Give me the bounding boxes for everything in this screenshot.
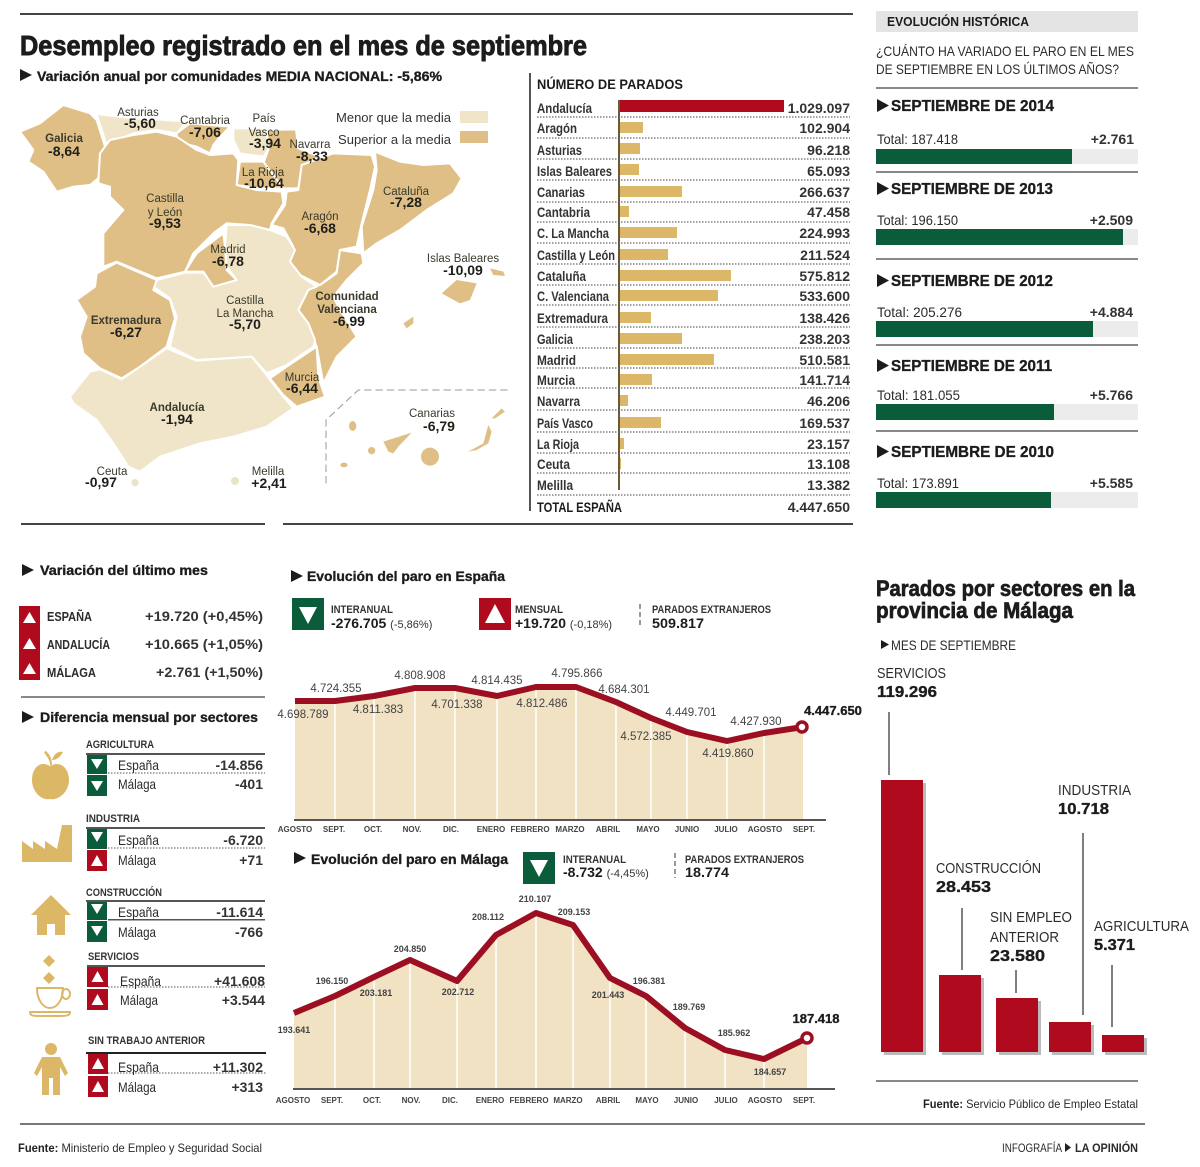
panel: variación del último mes [19,562,263,680]
interanual indicator [523,852,649,884]
panel: evolución del paro en España [277,568,862,834]
interanual indicator: -8.732 (-4,45%) [563,864,649,880]
foreign unemployed [675,853,804,880]
line chart: Málaga: ENERO [476,1096,504,1105]
year 2012: Total: 205.276 [877,304,962,320]
map labels: Cataluña [383,186,430,198]
line chart: Málaga: 196.150 [316,976,348,986]
map regions [20,105,510,486]
map labels: Islas Baleares [427,253,499,265]
line chart: Málaga: 201.443 [592,990,624,1000]
line chart: Málaga: JUNIO [674,1096,698,1105]
line chart: España: SEPT. [323,825,345,834]
year 2013: SEPTIEMBRE DE 2013 [891,181,1053,198]
map labels: Andalucía [150,402,205,414]
map labels: -5,60 [124,115,156,131]
row values: 96.218 [807,142,850,158]
España row: +19.720 (+0,45%) [145,608,263,624]
line chart: España: 4.447.650 [804,703,862,718]
footer: credit: INFOGRAFÍA [1002,1140,1062,1155]
bar: construcción: 28.453 [936,879,991,896]
panel heading [876,11,1138,32]
bar: sin empleo anterior: SIN EMPLEO [990,909,1072,926]
row values: 575.812 [799,268,850,284]
year 2013: +2.509 [1090,212,1133,228]
sector: construcción: España [118,904,159,920]
map legend: Menor que la media [336,110,452,125]
Andalucía row [47,636,263,652]
panel: map of Spain [20,105,510,491]
heading: Evolución del paro en España [307,568,505,584]
line chart: España: 4.814.435 [471,675,523,687]
row labels: Cataluña [537,268,586,284]
map labels: -10,09 [443,262,483,278]
dotted row separators [537,117,850,495]
line chart: Málaga: AGOSTO [276,1096,310,1105]
heading [876,576,1136,623]
sector: agricultura: Málaga [118,776,156,792]
map legend: Superior a la media [338,132,452,147]
row values: 4.447.650 [788,499,850,515]
heading: Diferencia mensual por sectores [40,709,258,725]
line chart: Málaga: 187.418 [792,1011,840,1026]
row values: 13.382 [807,477,850,493]
line chart: España: 4.701.338 [431,699,483,711]
line chart: España: FEBRERO [510,825,550,834]
row labels: Navarra [537,393,580,409]
line chart: Málaga: NOV. [402,1096,420,1105]
line chart: España: MARZO [555,825,585,834]
row labels [537,100,622,515]
map labels: -9,53 [149,215,181,231]
bar: agricultura: AGRICULTURA [1094,918,1189,935]
map labels: Castilla [226,295,264,307]
year 2010: Total: 173.891 [877,475,959,491]
map labels: Galicia [45,133,83,145]
sector: industria: INDUSTRIA [86,813,140,825]
row labels: Melilla [537,477,573,493]
line chart: España [277,668,862,834]
sector: servicios: +3.544 [222,992,265,1008]
question text: DE SEPTIEMBRE EN LOS ÚLTIMOS AÑOS? [876,61,1119,77]
row labels: País Vasco [537,415,593,431]
bar: servicios: 119.296 [877,684,937,701]
sector: industria: España [118,832,159,848]
row values: 533.600 [799,288,850,304]
line chart: España: 4.812.486 [516,698,568,710]
Málaga row [47,664,263,680]
footer: credit: LA OPINIÓN [1075,1140,1138,1155]
line chart: España: 4.427.930 [730,716,782,728]
line chart: España: JULIO [714,825,738,834]
map labels: Aragón [301,211,339,223]
bar: agricultura [1094,918,1189,1055]
panel: número de parados table [529,73,850,515]
row values: 46.206 [807,393,850,409]
line chart: Málaga: OCT. [363,1096,381,1105]
year 2014 [876,98,1138,164]
map labels: País [252,113,276,125]
year 2013 [876,181,1138,245]
map labels [45,107,499,491]
row labels: Canarias [537,184,585,200]
map legend [336,110,488,147]
sector: agricultura: -401 [235,776,263,792]
footer: source: Fuente: Ministerio de Empleo y Seguridad Social [18,1141,262,1155]
row labels: Castilla y León [537,247,615,263]
row labels: Ceuta [537,456,570,472]
line chart: Málaga: 203.181 [360,988,392,998]
line chart: Málaga: 196.381 [633,976,665,986]
bar: construcción [936,860,1041,1055]
row labels: C. La Mancha [537,225,609,241]
sector: sin trabajo anterior [86,1035,267,1097]
line chart: España: NOV. [403,825,421,834]
line chart: Málaga: SEPT. [321,1096,343,1105]
row values: 65.093 [807,163,850,179]
foreign unemployed: PARADOS EXTRANJEROS [685,854,804,866]
table heading: NÚMERO DE PARADOS [537,75,683,92]
map labels: -6,78 [212,253,244,269]
icon: apple [32,751,69,799]
row labels: Aragón [537,120,577,136]
row labels: Cantabria [537,204,590,220]
line chart: España: 4.698.789 [277,709,329,721]
line chart: España: ABRIL [596,825,620,834]
row labels: C. Valenciana [537,288,609,304]
year 2011: +5.766 [1090,387,1133,403]
line chart: España: SEPT. [793,825,815,834]
bar: sin empleo anterior: 23.580 [990,948,1045,965]
map subtitle: Variación anual por comunidades MEDIA NACIONAL: -5,86% [37,68,443,84]
bar: industria: 10.718 [1058,801,1109,818]
sector: sin trabajo anterior: +313 [231,1079,263,1095]
row values: 138.426 [799,310,850,326]
row values: 169.537 [799,415,850,431]
sector: construcción: CONSTRUCCIÓN [86,886,162,899]
line chart: España: 4.419.860 [702,748,754,760]
line chart: España: OCT. [364,825,382,834]
sector: construcción: Málaga [118,924,156,940]
map labels: -3,94 [249,135,281,151]
panel: diferencia mensual por sectores [22,709,267,1097]
map labels: La Mancha [217,308,274,320]
sector: sin trabajo anterior: SIN TRABAJO ANTERIOR [88,1035,205,1047]
row values: 102.904 [799,120,850,136]
interanual indicator: INTERANUAL [331,604,393,616]
mensual indicator: +19.720 (-0,18%) [515,615,612,631]
map labels: La Rioja [242,167,285,179]
interanual indicator: INTERANUAL [563,854,626,866]
line chart: España: AGOSTO [278,825,312,834]
panel: evolución histórica [876,11,1138,508]
year 2010 [876,444,1138,508]
panel heading: EVOLUCIÓN HISTÓRICA [887,14,1030,29]
map labels: -8,64 [48,143,80,159]
row labels: Extremadura [537,310,608,326]
line chart: Málaga: 210.107 [519,894,551,904]
source: Servicio Público: Fuente: Servicio Público de Empleo Estatal [923,1097,1138,1111]
map labels: -6,79 [423,418,455,434]
year 2014: Total: 187.418 [877,131,958,147]
panel: evolución del paro en Málaga [276,851,840,1105]
line chart: Málaga [276,894,840,1105]
map labels: y León [148,207,182,219]
Andalucía row: ANDALUCÍA [47,637,110,652]
year 2010: SEPTIEMBRE DE 2010 [891,444,1054,461]
row labels: La Rioja [537,436,579,452]
map labels: -6,27 [110,324,142,340]
line chart: Málaga: 189.769 [673,1002,705,1012]
map labels: Asturias [117,107,159,119]
map labels: -6,99 [333,313,365,329]
line chart: Málaga: AGOSTO [748,1096,782,1105]
row labels: Galicia [537,331,573,347]
sector: industria: -6.720 [223,832,263,848]
line chart: Málaga: JULIO [714,1096,738,1105]
line chart: Málaga: 193.641 [278,1025,310,1035]
map labels: Vasco [248,127,280,139]
map labels: Valenciana [317,304,377,316]
line chart: España: ENERO [477,825,505,834]
Málaga row: MÁLAGA [47,665,97,680]
bar: servicios: SERVICIOS [877,665,946,682]
icon: coffee cup [30,955,70,1016]
bar: construcción: CONSTRUCCIÓN [936,860,1041,877]
España row: ESPAÑA [47,609,93,624]
year 2013: Total: 196.150 [877,212,958,228]
map labels: Ceuta [97,466,128,478]
row values: 23.157 [807,436,850,452]
line chart: España: JUNIO [675,825,699,834]
row values: 238.203 [799,331,850,347]
line chart: Málaga: DIC. [442,1096,458,1105]
map labels: -1,94 [161,411,193,427]
line chart: España: 4.808.908 [394,670,446,682]
map labels: -10,64 [244,175,284,191]
year 2012: SEPTIEMBRE DE 2012 [891,273,1053,290]
row values: 47.458 [807,204,850,220]
panel: parados por sectores en Málaga [876,576,1189,1111]
year 2012: +4.884 [1090,304,1133,320]
year 2014: SEPTIEMBRE DE 2014 [891,98,1054,115]
sector: industria: +71 [239,852,263,868]
map labels: Extremadura [91,315,162,327]
sector: sin trabajo anterior: +11.302 [213,1059,263,1075]
bars [618,100,784,490]
map labels: Comunidad [315,291,379,303]
row values [788,100,850,515]
year 2011 [876,358,1138,420]
row values: 13.108 [807,456,850,472]
mensual indicator: MENSUAL [515,604,563,616]
Málaga row: +2.761 (+1,50%) [156,664,263,680]
icon: factory [22,825,72,862]
row labels: Murcia [537,372,575,388]
icon: person [34,1043,68,1095]
sector: agricultura: AGRICULTURA [86,739,154,751]
map labels: -0,97 [85,474,117,490]
bar: sin empleo anterior [990,909,1072,1055]
question text: ¿CUÁNTO HA VARIADO EL PARO EN EL MES [876,43,1134,59]
line chart: España: MAYO [636,825,660,834]
map labels: -6,68 [304,220,336,236]
bar: industria [1049,782,1131,1055]
interanual indicator [292,598,432,631]
map labels: -8,33 [296,148,328,164]
line chart: Málaga: MAYO [635,1096,659,1105]
foreign unemployed: 509.817 [652,615,704,631]
map labels: Cantabria [180,115,231,127]
line chart: España: 4.795.866 [551,668,603,680]
map labels: Melilla [252,466,285,478]
line chart: España: 4.724.355 [310,683,362,695]
row values: 141.714 [799,372,850,388]
line chart: Málaga: 208.112 [472,912,504,922]
map labels: +2,41 [251,475,287,491]
map labels: Navarra [290,139,331,151]
sector: sin trabajo anterior: España [118,1059,159,1075]
year 2011: Total: 181.055 [877,387,960,403]
sector: construcción: -11.614 [216,904,263,920]
sector: sin trabajo anterior: Málaga [118,1079,156,1095]
question text [876,43,1134,77]
heading: Variación del último mes [40,562,208,578]
map labels: -7,06 [189,124,221,140]
bar: industria: INDUSTRIA [1058,782,1131,799]
foreign unemployed: 18.774 [685,864,729,880]
line chart: Málaga: 204.850 [394,944,426,954]
sector: agricultura: España [118,757,159,773]
row values: 266.637 [799,184,850,200]
sector: servicios [87,951,265,1010]
foreign unemployed: PARADOS EXTRANJEROS [652,604,771,616]
year 2012 [876,273,1138,337]
line chart: Málaga: 185.962 [718,1028,750,1038]
heading: Evolución del paro en Málaga [311,851,508,867]
sector: construcción: -766 [235,924,263,940]
line chart: España: AGOSTO [748,825,782,834]
sector: industria: Málaga [118,852,156,868]
sub-heading: MES DE SEPTIEMBRE [891,637,1016,653]
line chart: Málaga: 209.153 [558,907,590,917]
map labels: -7,28 [390,194,422,210]
España row [47,608,263,624]
sector: agricultura [86,739,265,796]
map labels: Murcia [285,372,320,384]
row labels: Andalucía [537,100,592,116]
bar: agricultura: 5.371 [1094,937,1135,954]
row values: 1.029.097 [788,100,850,116]
line chart: Málaga: SEPT. [793,1096,815,1105]
heading: Parados por sectores en la [876,576,1136,601]
line chart: España: 4.572.385 [620,731,672,743]
map labels: -5,70 [229,316,261,332]
sector: industria [86,813,265,871]
line chart: Málaga: ABRIL [596,1096,620,1105]
footer: credit [1002,1140,1138,1155]
line chart: España: 4.449.701 [665,707,717,719]
sector: servicios: +41.608 [214,973,265,989]
row labels: Asturias [537,142,582,158]
red indicators [19,606,40,680]
map labels: Castilla [146,193,184,205]
bar: sin empleo anterior: ANTERIOR [990,929,1059,946]
heading: provincia de Málaga [876,598,1074,623]
year 2011: SEPTIEMBRE DE 2011 [891,358,1052,375]
mensual indicator [479,598,612,631]
map labels: -6,44 [286,380,318,396]
row labels: Islas Baleares [537,163,612,179]
line chart: Málaga: 202.712 [442,987,474,997]
line chart: España: 4.684.301 [598,684,650,696]
line chart: Málaga: FEBRERO [509,1096,549,1105]
line chart: España: 4.811.383 [353,704,403,716]
row labels: Madrid [537,352,576,368]
header [20,13,853,84]
foreign unemployed [640,604,771,631]
row values: 211.524 [800,247,850,263]
icon: house [31,895,71,935]
Andalucía row: +10.665 (+1,05%) [145,636,263,652]
sector: servicios: SERVICIOS [88,951,139,963]
year 2010: +5.585 [1090,475,1133,491]
sector: servicios: España [120,973,161,989]
year 2014: +2.761 [1091,131,1134,147]
row labels: TOTAL ESPAÑA [537,498,622,515]
interanual indicator: -276.705 (-5,86%) [331,615,432,631]
line chart: Málaga: MARZO [553,1096,583,1105]
bar: servicios [877,665,946,1055]
row values: 224.993 [799,225,850,241]
row values: 510.581 [799,352,850,368]
sector: construcción [86,886,265,942]
line chart: España: DIC. [443,825,459,834]
map labels: Canarias [409,408,455,420]
line chart: Málaga: 184.657 [754,1067,786,1077]
sector: agricultura: -14.856 [216,757,263,773]
sector: servicios: Málaga [120,992,158,1008]
map labels: Madrid [210,244,246,256]
title: Desempleo registrado en el mes de septiembre [20,30,587,61]
